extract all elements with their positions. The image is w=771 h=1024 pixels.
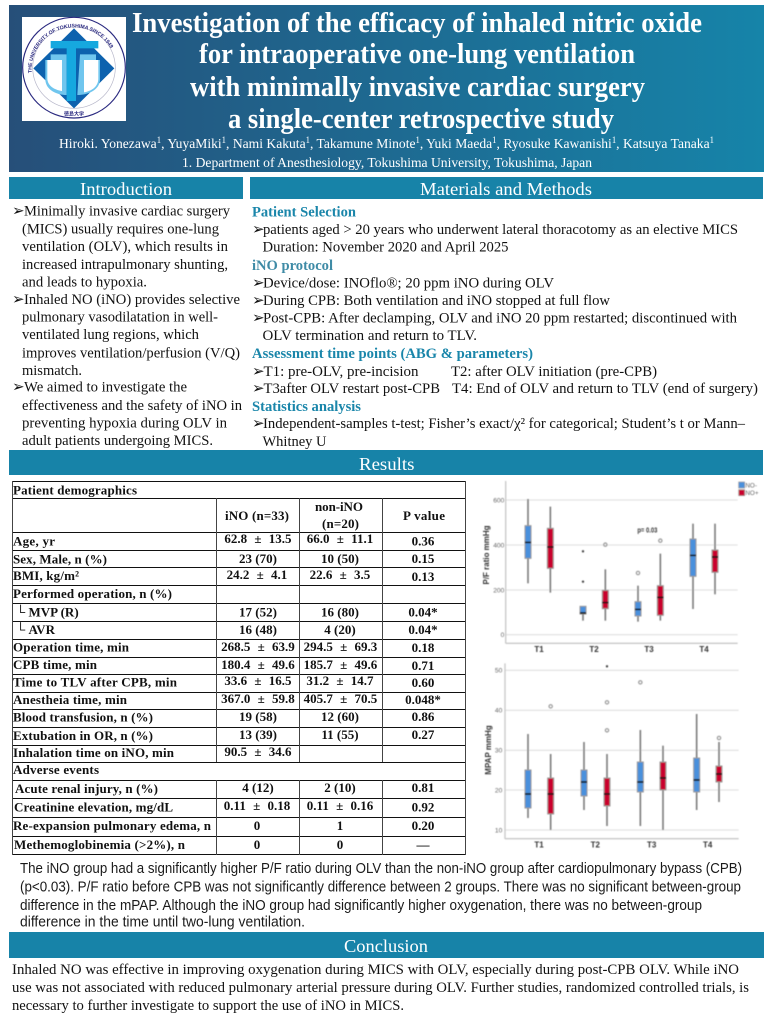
table: patient demographics: 22.6 ± 3.5	[310, 567, 371, 582]
text block: iNO protocol: Device/dose: INOflo®; 20 ppm iNO during OLV	[263, 276, 554, 292]
table: patient demographics: 12 (60)	[321, 709, 359, 724]
authors: , Katsuya Tanaka	[616, 137, 710, 152]
panel: conclusion	[9, 932, 764, 1014]
table: patient demographics: 17 (52)	[239, 605, 277, 620]
text block: assessment time points: Assessment time points (ABG & parameters)	[252, 346, 533, 362]
table: patient demographics: 11 (55)	[321, 727, 359, 742]
chart: P/F ratio box plot: T1	[534, 645, 544, 654]
chart: P/F ratio box plot: P/F ratio mmHg	[482, 525, 491, 585]
table: patient demographics: 16 (48)	[239, 622, 277, 637]
chart: MPAP box plot: 20	[495, 787, 503, 794]
table: patient demographics: 185.7 ± 49.6	[304, 657, 378, 672]
table: patient demographics: 24.2 ± 4.1	[227, 567, 287, 582]
chart: MPAP box plot: T3	[647, 840, 657, 849]
heading: materials and methods: Materials and Methods	[420, 179, 592, 199]
table: patient demographics: 0.20	[412, 818, 434, 833]
chart: P/F ratio box plot: 0	[501, 632, 505, 639]
table: patient demographics: CPB time, min	[13, 657, 98, 672]
table: patient demographics: └ MVP (R)	[16, 605, 79, 620]
text block: introduction bullets: and leads to hypoxia.	[22, 275, 147, 291]
authors: 1	[157, 135, 161, 145]
table: patient demographics: 367.0 ± 59.8	[221, 691, 295, 706]
table: patient demographics: 0.13	[412, 569, 435, 584]
text block: statistics analysis: Whitney U	[262, 434, 327, 450]
text block: introduction bullets: ➢	[12, 290, 25, 308]
text block: introduction bullets: pulmonary vasodilatation in well-	[22, 310, 218, 326]
heading: conclusion	[9, 932, 764, 958]
table: patient demographics: 405.7 ± 70.5	[304, 691, 378, 706]
text block: introduction bullets	[12, 202, 242, 449]
text block: conclusion text	[12, 962, 749, 1014]
chart: P/F ratio box plot: p= 0.03	[637, 528, 657, 535]
table: patient demographics: Re-expansion pulmonary edema, n	[13, 818, 212, 833]
chart: MPAP box plot: 10	[495, 827, 503, 834]
icon: University of Tokushima logo: THE UNIVERSITY OF TOKUSHIMA SINCE 1949	[28, 24, 114, 74]
text block: statistics analysis: ➢	[252, 414, 265, 432]
chart: P/F ratio box plot: T2	[589, 645, 599, 654]
table: patient demographics: 66.0 ± 11.1	[307, 531, 373, 546]
chart: P/F ratio box plot: T3	[644, 645, 654, 654]
table: patient demographics: BMI, kg/m²	[13, 568, 79, 583]
authors: Hiroki. Yonezawa	[59, 137, 160, 152]
text block: introduction bullets: ➢	[12, 202, 25, 220]
table: patient demographics: Creatinine elevation, mg/dL	[14, 800, 173, 815]
table: patient demographics: Extubation in OR, n (%)	[13, 728, 153, 743]
text block: iNO protocol: Post-CPB: After declamping, OLV and iNO 20 ppm restarted; discontinued with	[263, 311, 737, 327]
table: patient demographics: 0.04*	[408, 605, 438, 620]
heading: introduction	[9, 177, 243, 199]
text block: results summary	[20, 861, 742, 931]
text block: assessment time points: T1: pre-OLV, pre-incision	[264, 364, 419, 380]
icon: University of Tokushima logo	[22, 16, 126, 121]
heading: results	[9, 450, 763, 475]
text block: introduction bullets: improves ventilation/perfusion (V/Q)	[22, 345, 240, 361]
table: patient demographics	[12, 481, 466, 855]
table: patient demographics: 23 (70)	[239, 551, 277, 566]
text block: assessment time points: T3after OLV restart post-CPB	[264, 381, 440, 397]
text block: results summary: difference in the mPAP. Although the iNO group had significantly higher oxygenation, there was no between-group	[20, 898, 702, 914]
table: patient demographics: 0	[254, 837, 260, 852]
text block: introduction bullets: (MICS) usually requires one-lung	[22, 221, 219, 237]
chart: MPAP box plot: MPAP mmHg	[484, 725, 493, 775]
chart: MPAP box plot: 50	[495, 668, 503, 675]
text block: conclusion text: Inhaled NO was effective in improving oxygenation during MICS with OLV, especially during post-CPB OLV. While iNO	[12, 962, 739, 978]
text block: introduction bullets: mismatch.	[22, 363, 82, 379]
authors: , Nami Kakuta	[226, 137, 306, 152]
chart: MPAP box plot: T4	[703, 840, 713, 849]
authors: 1	[710, 135, 714, 145]
table: patient demographics: non-iNO	[315, 499, 363, 514]
table: patient demographics: Sex, Male, n (%)	[13, 552, 107, 567]
authors: , Takamune Minote	[310, 137, 416, 152]
legend	[739, 482, 759, 497]
table: patient demographics: 0.81	[412, 780, 434, 795]
legend: NO+	[745, 490, 759, 497]
panel: materials and methods	[250, 177, 763, 450]
table: patient demographics: 0	[254, 818, 260, 833]
text block: assessment time points: T2: after OLV initiation (pre-CPB)	[451, 364, 657, 380]
text block: iNO protocol	[252, 258, 737, 344]
text block: statistics analysis: Statistics analysis	[252, 399, 361, 415]
authors: 1	[612, 135, 616, 145]
text block: introduction bullets: ventilated lung regions, which	[22, 327, 199, 343]
text block: introduction bullets: ➢	[12, 378, 25, 396]
text block: assessment time points: T4: End of OLV and return to TLV (end of surgery)	[452, 381, 758, 397]
table: patient demographics: 90.5 ± 34.6	[224, 744, 292, 759]
table: patient demographics: 16 (80)	[321, 605, 359, 620]
table: patient demographics: 0.04*	[408, 622, 438, 637]
text block: patient selection	[252, 205, 738, 256]
table: patient demographics: 0.86	[412, 709, 435, 724]
table: patient demographics: 180.4 ± 49.6	[221, 657, 295, 672]
text block: introduction bullets: Inhaled NO (iNO) provides selective	[24, 292, 240, 308]
authors: , Ryosuke Kawanishi	[497, 137, 612, 152]
text block: patient selection: Duration: November 2020 and April 2025	[262, 240, 508, 256]
title	[132, 7, 702, 135]
table: patient demographics: P value	[403, 508, 445, 523]
chart: MPAP box plot: T2	[591, 840, 601, 849]
text block: conclusion text: necessary to further investigate to support the use of iNO in MICS.	[12, 998, 404, 1014]
table: patient demographics: 0.92	[412, 800, 434, 815]
text block: patient selection: patients aged > 20 years who underwent lateral thoracotomy as an elective MICS	[263, 222, 738, 238]
table: patient demographics: Methemoglobinemia (>2%), n	[14, 837, 186, 852]
table: patient demographics: 0.048*	[405, 692, 441, 707]
text block: introduction bullets: adult patients undergoing MICS.	[22, 433, 213, 449]
table: patient demographics: 1	[337, 818, 343, 833]
text block: patient selection: Patient Selection	[252, 205, 356, 221]
text block: introduction bullets: increased intrapulmonary shunting,	[22, 257, 228, 273]
text block: statistics analysis	[252, 399, 745, 450]
table: patient demographics: Age, yr	[13, 534, 55, 549]
table: patient demographics: 0.18	[412, 640, 435, 655]
text block: conclusion text: use was not associated with reduced pulmonary arterial pressure during OLV. Further studies, randomized controlled trials, is	[12, 980, 749, 996]
legend: NO-	[745, 483, 757, 490]
authors: , Yuki Maeda	[420, 137, 493, 152]
header banner	[9, 5, 764, 172]
text block: introduction bullets: Minimally invasive cardiac surgery	[24, 204, 230, 220]
text block: statistics analysis: Independent-samples t-test; Fisher’s exact/χ² for categorical; Student’s t or Mann–	[263, 416, 745, 432]
table: patient demographics: Blood transfusion, n (%)	[13, 710, 153, 725]
authors: 1	[416, 135, 420, 145]
table: patient demographics: Anestheia time, min	[13, 692, 128, 707]
text block: iNO protocol: ➢	[252, 291, 265, 309]
chart: P/F ratio box plot: 400	[493, 542, 505, 549]
chart: MPAP box plot: 40	[495, 708, 503, 715]
table: patient demographics: 0	[337, 837, 343, 852]
chart: P/F ratio box plot: T4	[699, 645, 709, 654]
table: patient demographics: 0.15	[412, 551, 435, 566]
table: patient demographics: └ AVR	[16, 622, 56, 637]
table: patient demographics: 10 (50)	[321, 551, 359, 566]
table: patient demographics: 0.60	[412, 675, 434, 690]
text block: iNO protocol: OLV termination and return to TLV.	[262, 328, 477, 344]
icon: University of Tokushima logo: 徳島大学	[64, 111, 84, 118]
table: patient demographics: 4 (20)	[324, 622, 356, 637]
table: patient demographics: 13 (39)	[239, 727, 277, 742]
table: patient demographics: 0.36	[412, 534, 435, 549]
table: patient demographics: 0.71	[412, 658, 434, 673]
heading: materials and methods	[250, 177, 763, 199]
title: with minimally invasive cardiac surgery	[190, 71, 645, 103]
table: patient demographics: 268.5 ± 63.9	[221, 639, 295, 654]
heading: conclusion: Conclusion	[344, 936, 428, 956]
authors: 1	[492, 135, 497, 145]
chart: MPAP box plot: 30	[495, 748, 503, 755]
text block: introduction bullets: ventilation (OLV), which results in	[22, 239, 228, 255]
title: Investigation of the efficacy of inhaled nitric oxide	[132, 7, 702, 39]
heading: introduction: Introduction	[80, 179, 172, 199]
table: patient demographics: (n=20)	[322, 516, 359, 531]
text block: patient selection: ➢	[252, 220, 265, 238]
authors: 1	[222, 135, 226, 145]
title: for intraoperative one-lung ventilation	[199, 38, 635, 70]
text block: iNO protocol: ➢	[252, 309, 265, 327]
table: patient demographics: Acute renal injury, n (%)	[15, 781, 158, 796]
table: patient demographics: Adverse events	[13, 762, 99, 777]
chart: P/F ratio box plot: 200	[493, 587, 505, 594]
table: patient demographics: 294.5 ± 69.3	[304, 639, 378, 654]
text block: assessment time points	[252, 346, 758, 397]
text block: assessment time points: ➢	[252, 379, 265, 397]
chart: P/F ratio box plot	[482, 481, 759, 654]
affiliation: 1. Department of Anesthesiology, Tokushima University, Tokushima, Japan	[182, 156, 592, 171]
panel: introduction	[9, 177, 243, 449]
table: patient demographics: Operation time, min	[13, 640, 130, 655]
text block: assessment time points: ➢	[252, 362, 265, 380]
text block: introduction bullets: We aimed to investigate the	[24, 380, 187, 396]
table: patient demographics: Patient demographics	[13, 482, 137, 497]
table: patient demographics: Inhalation time on iNO, min	[13, 745, 175, 760]
table: patient demographics: —	[416, 837, 430, 852]
table: patient demographics: 19 (58)	[239, 709, 277, 724]
chart: MPAP box plot: T1	[534, 840, 544, 849]
table: patient demographics: 62.8 ± 13.5	[224, 531, 292, 546]
title: a single-center retrospective study	[228, 103, 614, 135]
chart: MPAP box plot	[484, 663, 739, 849]
table: patient demographics: 31.2 ± 14.7	[306, 673, 374, 688]
table: patient demographics: Time to TLV after CPB, min	[13, 675, 178, 690]
table: patient demographics: 2 (10)	[324, 780, 356, 795]
table: patient demographics: 0.27	[412, 727, 435, 742]
table: patient demographics: 4 (12)	[242, 780, 274, 795]
text block: introduction bullets: preventing hypoxia during OLV in	[22, 415, 227, 431]
text block: iNO protocol: iNO protocol	[252, 258, 333, 274]
table: patient demographics: Performed operation, n (%)	[13, 586, 172, 601]
table: patient demographics: 0.11 ± 0.16	[307, 798, 374, 813]
heading: results: Results	[359, 454, 414, 474]
authors: , YuyaMiki	[161, 137, 222, 152]
text block: iNO protocol: ➢	[252, 274, 265, 292]
chart: P/F ratio box plot: 600	[493, 497, 505, 504]
text block: introduction bullets: effectiveness and the safety of iNO in	[22, 398, 242, 414]
authors: 1	[306, 135, 310, 145]
text block: results summary: difference in the time until two-lung ventilation.	[20, 915, 305, 931]
table: patient demographics: iNO (n=33)	[225, 508, 289, 523]
table: patient demographics: 33.6 ± 16.5	[224, 673, 292, 688]
table: patient demographics: 0.11 ± 0.18	[224, 798, 291, 813]
text block: iNO protocol: During CPB: Both ventilation and iNO stopped at full flow	[263, 293, 610, 309]
